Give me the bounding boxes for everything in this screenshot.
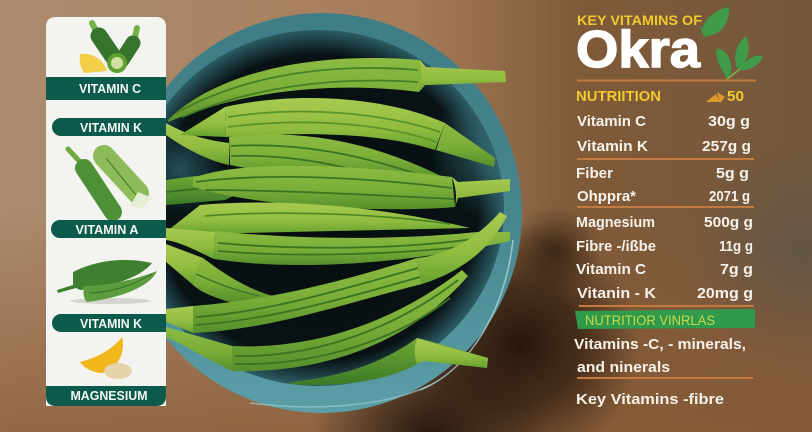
table rows: 2071 g	[709, 188, 750, 205]
banner: vitamin A	[51, 220, 166, 238]
table rows: Fibre -/ißbe	[576, 238, 656, 255]
banner: vitamin C	[46, 77, 166, 100]
text block: vitamins and minerals	[574, 336, 746, 376]
table rows: Fiber	[576, 165, 613, 182]
icon: leaf top	[700, 7, 729, 38]
banner: vitamin A: VITAMIN A	[76, 222, 139, 237]
title block: Okra	[576, 21, 701, 79]
table rows: Vitamin C	[577, 113, 646, 130]
table rows: 5g g	[716, 165, 749, 182]
table rows: 20mg g	[697, 285, 753, 302]
table rows	[576, 113, 753, 302]
title block: KEY VITAMINS OF	[577, 13, 702, 28]
banner: vitamin C: VITAMIN C	[79, 81, 142, 96]
nutrition table	[576, 80, 756, 378]
okra: back pod upper-left	[166, 176, 260, 205]
table rows: 11g g	[719, 238, 753, 255]
table rows: 7g g	[720, 261, 753, 278]
banner: vitamin K second: VITAMIN K	[80, 316, 143, 331]
okra: pod 7 back-left	[166, 244, 273, 303]
table rows: Ohppra*	[577, 188, 636, 205]
table heading: 50	[727, 89, 744, 105]
table rows: Vitanin - K	[577, 285, 656, 302]
banner: vitamin K: VITAMIN K	[80, 120, 143, 135]
okra: pod 4	[193, 166, 510, 209]
okra: pod 1	[168, 58, 506, 122]
banner: vitamin K second	[52, 314, 166, 332]
okra: pod 5	[166, 203, 470, 234]
table rows: Vitamin C	[576, 261, 646, 278]
bowl	[166, 13, 522, 413]
left panel: vitamin sidebar	[46, 17, 166, 406]
okra: pod 9 long curve	[166, 270, 468, 371]
okra: pod 6	[166, 228, 510, 265]
banner: magnesium	[46, 386, 166, 406]
okra: pod 8 main diagonal	[166, 212, 507, 333]
table rows: Magnesium	[576, 214, 655, 231]
green banner: nutrition minerals: NUTRITIOR VINRLAS	[585, 312, 715, 328]
table rows: Vitamin K	[577, 138, 648, 155]
icon: okra with lemon	[80, 23, 137, 73]
table heading: NUTRIITION	[576, 89, 661, 105]
table heading	[576, 89, 744, 105]
icon: leaves right	[716, 36, 763, 79]
text block: key vitamins fibre: Key Vitamins -fibre	[576, 391, 724, 408]
okra: pod 3	[166, 123, 443, 180]
text block: vitamins and minerals: Vitamins -C, - minerals,	[574, 336, 746, 353]
banner: magnesium: MAGNESIUM	[70, 388, 148, 403]
okra pods in bowl	[166, 58, 510, 385]
table rows: 257g g	[702, 138, 751, 155]
green banner: nutrition minerals	[575, 309, 755, 329]
table rows: 30g g	[708, 113, 750, 130]
text block: vitamins and minerals: and ninerals	[577, 359, 670, 376]
banner: vitamin K	[52, 118, 166, 136]
okra: pod 2	[180, 98, 495, 167]
icon: okra pair	[57, 260, 157, 304]
okra: bottom short pod	[290, 338, 488, 385]
icon: okra pods	[68, 149, 152, 212]
table rows: 500g g	[704, 214, 753, 231]
icon: lemon and ginger	[80, 337, 132, 379]
